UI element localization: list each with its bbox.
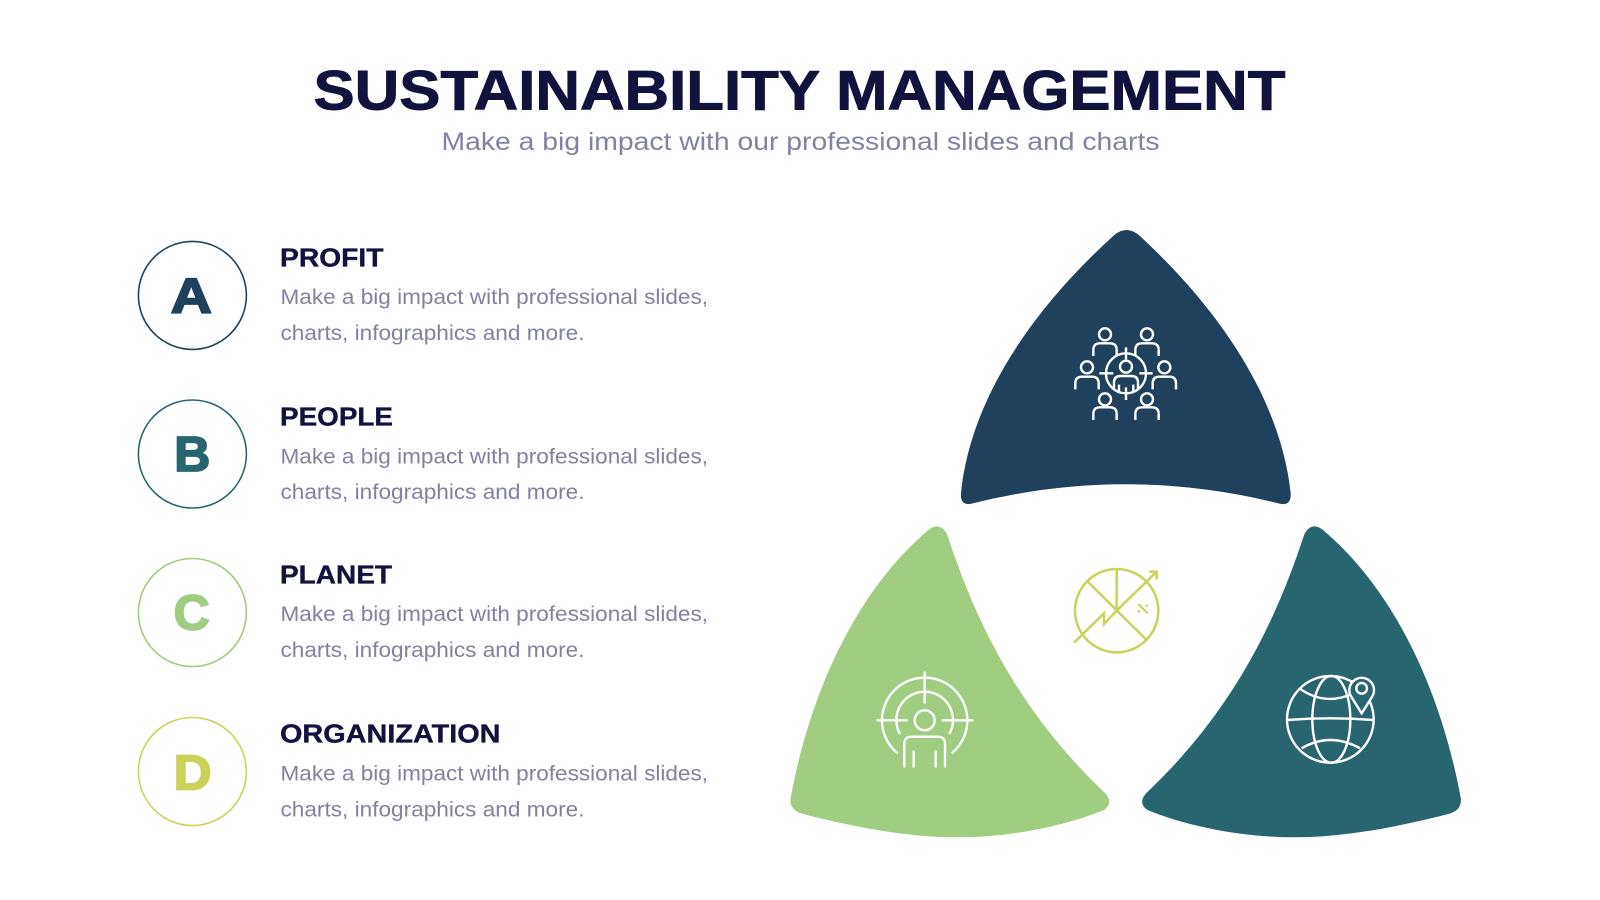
description: people: charts, infographics and more.: [280, 481, 584, 504]
list item B: people: [138, 400, 708, 508]
heading: organization: ORGANIZATION: [280, 721, 500, 749]
title: SUSTAINABILITY MANAGEMENT: [314, 58, 1286, 122]
description: people: [280, 445, 708, 504]
heading: planet: PLANET: [280, 561, 392, 589]
badge A: [138, 241, 246, 349]
badge B: [138, 400, 246, 508]
description: organization: [280, 763, 708, 822]
list item C: planet: [138, 558, 708, 666]
panel: top navy petal: [961, 230, 1291, 504]
heading: profit: PROFIT: [280, 245, 384, 273]
description: planet: [280, 603, 708, 662]
badge C: [138, 558, 246, 666]
description: profit: Make a big impact with professional slides,: [280, 286, 708, 309]
icon: people target: [1075, 328, 1176, 420]
description: profit: charts, infographics and more.: [280, 322, 584, 345]
list item A: profit: [138, 241, 708, 349]
badge D: D: [174, 746, 212, 800]
badge C: C: [174, 586, 210, 640]
description: organization: Make a big impact with professional slides,: [280, 763, 708, 786]
panel: bottom-left green petal: [790, 526, 1109, 837]
description: profit: [280, 286, 708, 345]
badge A: A: [171, 270, 212, 324]
panel: bottom-right teal petal: [1142, 526, 1461, 837]
badge B: B: [174, 428, 210, 482]
description: planet: Make a big impact with professional slides,: [280, 603, 708, 626]
description: organization: charts, infographics and more.: [280, 799, 584, 822]
icon: growth chart: [1074, 569, 1158, 652]
icon: globe with pin: [1287, 676, 1374, 763]
heading: people: PEOPLE: [280, 404, 393, 432]
description: planet: charts, infographics and more.: [280, 639, 584, 662]
badge D: [138, 718, 246, 826]
list item D: organization: [138, 718, 708, 826]
description: people: Make a big impact with professional slides,: [280, 445, 708, 468]
icon: person in target: [877, 671, 973, 767]
subtitle: Make a big impact with our professional slides and charts: [442, 128, 1160, 156]
